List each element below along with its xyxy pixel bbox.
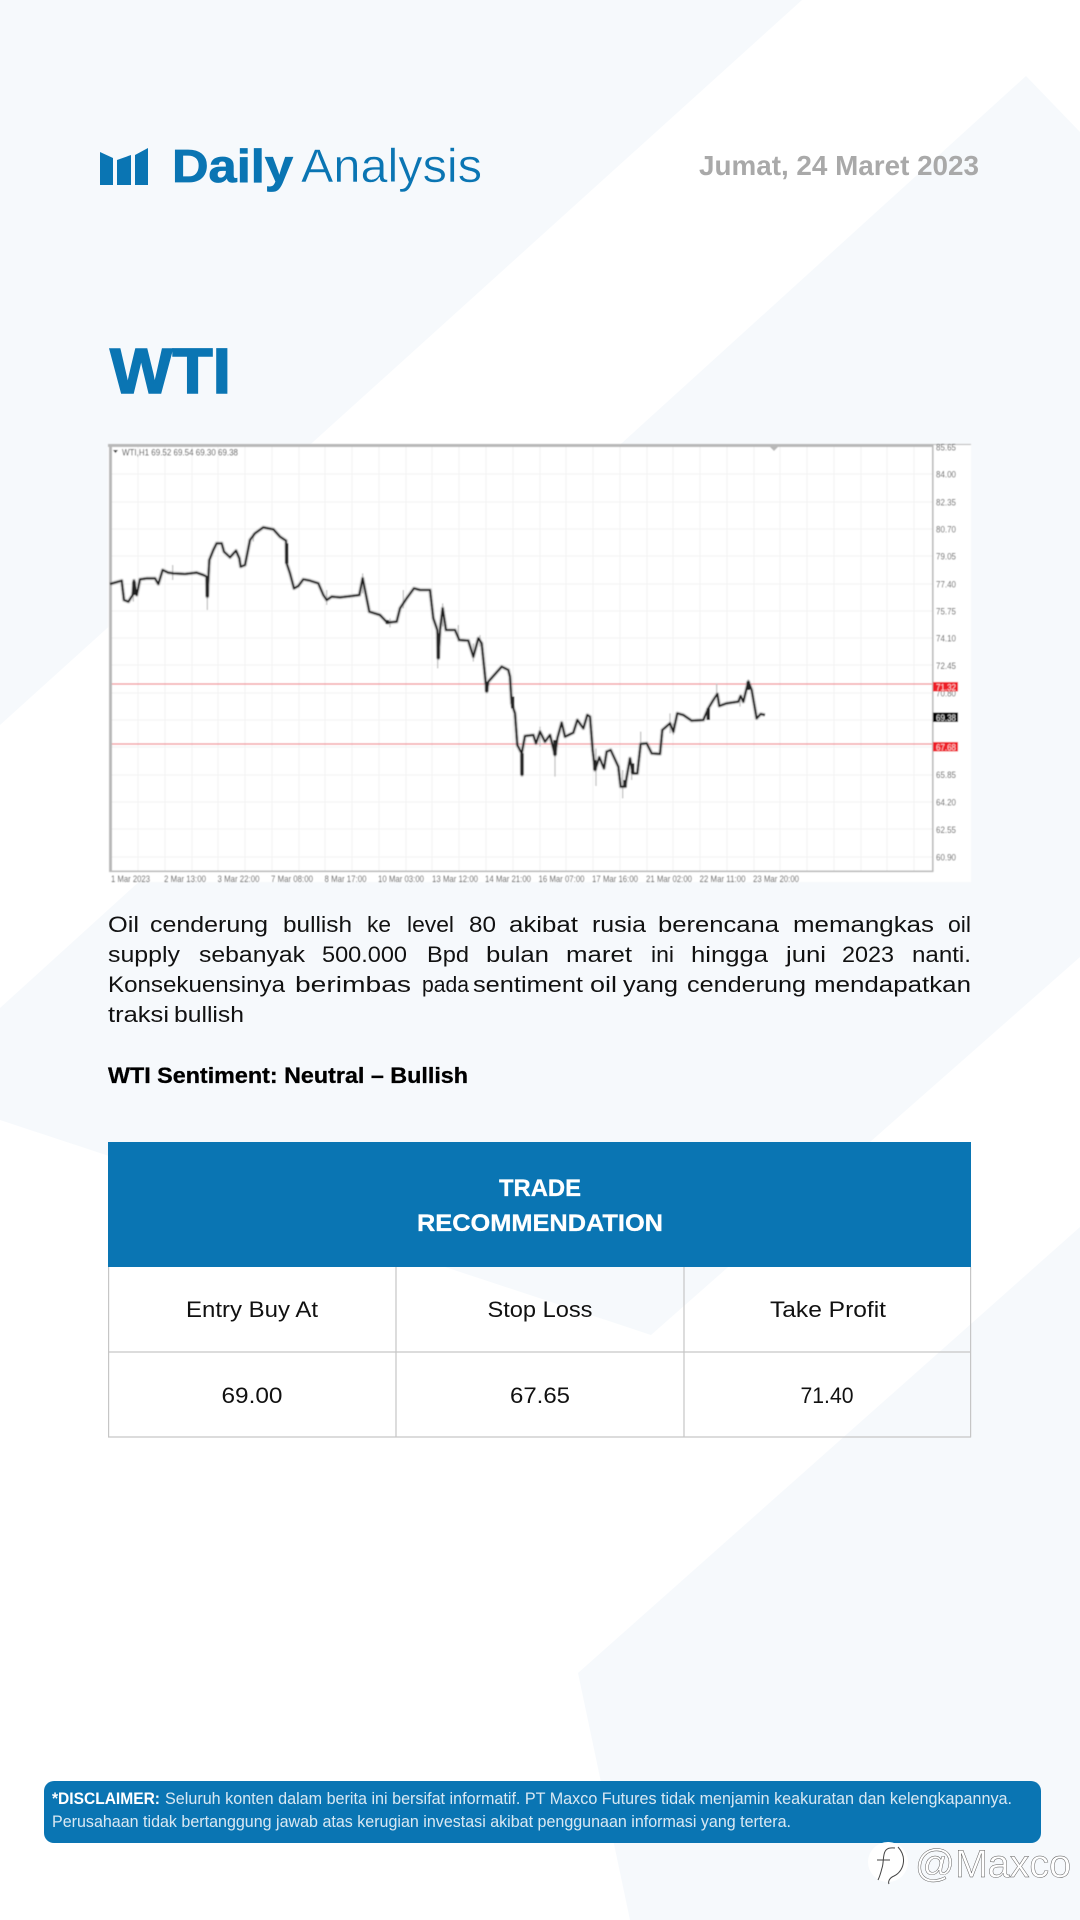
body paragraph: Bpd: [427, 942, 469, 967]
time axis labels: 17 Mar 16:00: [592, 874, 638, 885]
body paragraph: 80: [469, 912, 496, 937]
table header: RECOMMENDATION: [417, 1210, 663, 1237]
watermark: @Maxco: [868, 1842, 1071, 1886]
heading: WTI: WTI: [110, 335, 231, 407]
trade recommendation table: [108, 1142, 971, 1437]
price axis labels: 70.80: [936, 688, 956, 700]
price axis labels: 72.45: [936, 661, 956, 672]
price axis labels: 64.20: [936, 798, 956, 808]
logo word Analysis: Analysis: [301, 139, 482, 192]
body paragraph: [108, 912, 971, 1027]
price tag 71.32: 71.32: [936, 682, 956, 693]
price axis labels: 84.00: [936, 470, 956, 480]
body paragraph: oil: [948, 912, 971, 937]
time axis labels: 8 Mar 17:00: [324, 874, 366, 885]
body paragraph: traksi: [108, 1002, 169, 1027]
body paragraph: ini: [651, 942, 674, 967]
price axis labels: [936, 442, 956, 864]
time axis labels: 22 Mar 11:00: [700, 874, 746, 885]
price axis labels: 79.05: [936, 552, 956, 562]
body paragraph: bullish: [174, 1002, 244, 1027]
price axis labels: 60.90: [936, 852, 956, 864]
sentiment line: WTI Sentiment: Neutral – Bullish: [108, 1063, 468, 1088]
body paragraph: pada: [422, 972, 469, 997]
disclaimer bar: Perusahaan tidak bertanggung jawab atas kerugian investasi akibat penggunaan informasi yang tertera.: [52, 1813, 791, 1831]
time axis labels: 2 Mar 13:00: [164, 874, 206, 885]
table labels row: Stop Loss: [488, 1297, 592, 1322]
table labels row: Take Profit: [770, 1297, 887, 1322]
body paragraph: 500.000: [322, 942, 407, 967]
body paragraph: maret: [566, 942, 633, 967]
table grid: [108, 1267, 971, 1437]
disclaimer bar: *DISCLAIMER:: [52, 1790, 160, 1808]
table values row: 69.00: [222, 1383, 282, 1408]
price axis labels: 85.65: [936, 442, 956, 454]
chart frame: [108, 444, 971, 872]
time axis labels: 7 Mar 08:00: [271, 874, 313, 885]
chart header readout: WTI,H1 69.52 69.54 69.30 69.38: [122, 448, 238, 458]
body paragraph: bullish: [283, 912, 352, 937]
support and resistance lines: [112, 684, 933, 744]
body paragraph: supply: [108, 942, 181, 967]
body paragraph: akibat: [509, 912, 579, 937]
time axis labels: [111, 874, 799, 885]
body paragraph: mendapatkan: [814, 972, 971, 997]
time axis labels: 14 Mar 21:00: [485, 874, 531, 885]
table values row: 67.65: [510, 1383, 570, 1408]
body paragraph: oil: [590, 972, 617, 997]
time axis labels: 13 Mar 12:00: [432, 874, 478, 885]
body paragraph: Konsekuensinya: [108, 972, 286, 997]
body paragraph: berimbas: [295, 972, 411, 997]
table header: [108, 1142, 971, 1267]
price axis labels: 65.85: [936, 770, 956, 781]
time axis labels: 23 Mar 20:00: [753, 874, 799, 885]
icon: watermark badge: [868, 1842, 908, 1884]
body paragraph: cenderung: [150, 912, 268, 937]
disclaimer bar: Seluruh konten dalam berita ini bersifat informatif. PT Maxco Futures tidak menjamin keakuratan dan kelengkapannya.: [165, 1790, 1012, 1808]
time axis labels: 3 Mar 22:00: [218, 874, 260, 885]
logo word Daily: Daily: [172, 140, 293, 192]
price axis labels: 74.10: [936, 634, 956, 644]
price axis labels: 75.75: [936, 606, 956, 618]
body paragraph: sentiment: [473, 972, 584, 997]
body paragraph: berencana: [658, 912, 780, 937]
body paragraph: juni: [785, 942, 826, 967]
body paragraph: nanti.: [912, 942, 971, 967]
body paragraph: Oil: [108, 912, 139, 937]
body paragraph: memangkas: [793, 912, 934, 937]
body paragraph: 2023: [842, 942, 894, 967]
price axis labels: 77.40: [936, 580, 956, 590]
body paragraph: ke: [367, 912, 391, 937]
price line: [110, 527, 765, 798]
body paragraph: sebanyak: [199, 942, 306, 967]
table values row: [222, 1383, 854, 1408]
price tag 67.68: 67.68: [936, 742, 956, 753]
body paragraph: rusia: [592, 912, 647, 937]
price axis labels: 80.70: [936, 524, 956, 536]
logo: Daily Analysis: [100, 139, 482, 192]
body paragraph: level: [407, 912, 454, 937]
icon: bar chart logo mark: [100, 148, 148, 185]
time axis labels: 16 Mar 07:00: [538, 874, 584, 885]
date: Jumat, 24 Maret 2023: [699, 150, 979, 181]
time axis labels: 10 Mar 03:00: [378, 874, 424, 885]
price axis labels: 82.35: [936, 498, 956, 508]
price axis labels: 62.55: [936, 825, 956, 836]
table header: TRADE: [499, 1175, 581, 1202]
watermark handle: @Maxco: [915, 1843, 1071, 1886]
disclaimer bar: [44, 1781, 1041, 1843]
time axis labels: 21 Mar 02:00: [646, 874, 692, 885]
body paragraph: cenderung: [687, 972, 806, 997]
price tag 69.38: 69.38: [936, 713, 956, 724]
body paragraph: yang: [623, 972, 678, 997]
table labels row: Entry Buy At: [186, 1297, 319, 1322]
chart: WTI H1 price chart: [108, 442, 971, 885]
body paragraph: hingga: [691, 942, 769, 967]
time axis labels: 1 Mar 2023: [111, 874, 150, 885]
body paragraph: bulan: [486, 942, 549, 967]
table values row: 71.40: [800, 1383, 854, 1408]
table labels row: [186, 1297, 887, 1322]
